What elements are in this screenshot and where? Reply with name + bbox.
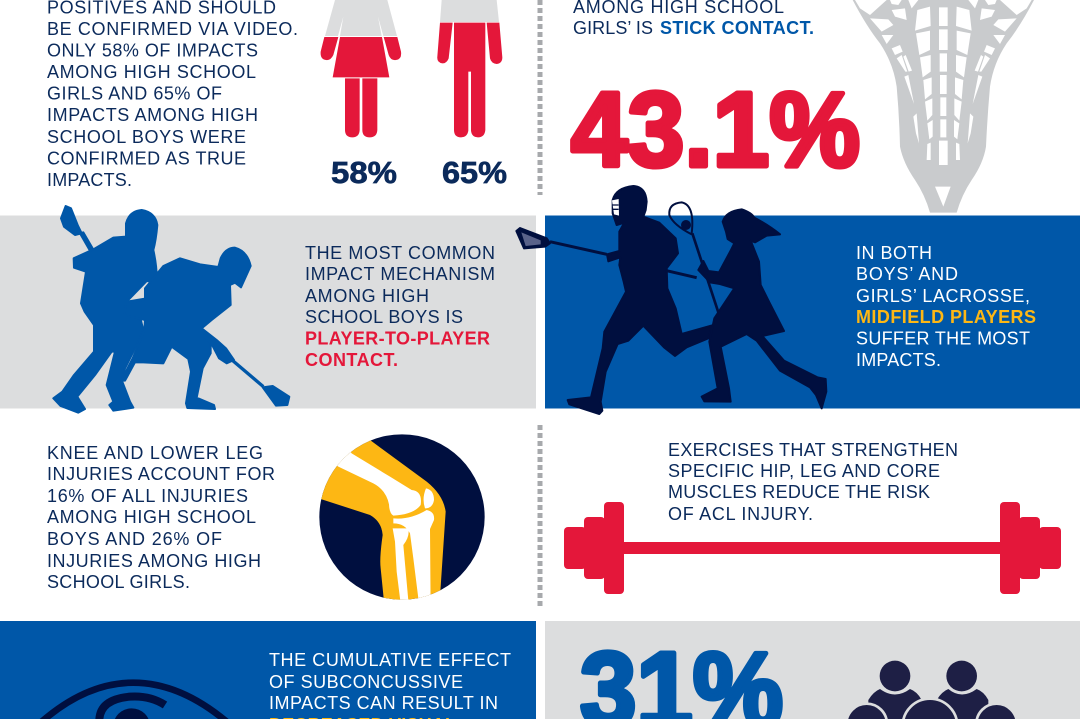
panel: player-to-player background bbox=[0, 216, 536, 408]
panel: false positives text: BE CONFIRMED VIA VIDEO. bbox=[47, 19, 298, 39]
panel: 31 percent background bbox=[545, 621, 1080, 719]
text: knee and lower leg injuries: INJURIES ACCOUNT FOR bbox=[47, 464, 275, 484]
icon: boy figure 65 percent bbox=[437, 0, 502, 137]
text: knee and lower leg injuries: INJURIES AMONG HIGH bbox=[47, 551, 261, 571]
panel: false positives text bbox=[47, 0, 298, 190]
text: player-to-player contact bbox=[305, 243, 495, 370]
icon: barbell bbox=[564, 502, 1061, 594]
stat: 65 percent: 65% bbox=[442, 155, 507, 190]
text: knee and lower leg injuries: KNEE AND LOWER LEG bbox=[47, 443, 263, 463]
text: exercises reduce ACL risk: MUSCLES REDUCE THE RISK bbox=[668, 482, 930, 502]
icon: knee joint bbox=[319, 434, 485, 600]
text: decreased visual: OF SUBCONCUSSIVE bbox=[269, 672, 463, 692]
text: knee and lower leg injuries: SCHOOL GIRLS. bbox=[47, 572, 190, 592]
panel: false positives text: CONFIRMED AS TRUE bbox=[47, 148, 246, 168]
text: knee and lower leg injuries: 16% OF ALL INJURIES bbox=[47, 486, 248, 506]
text: exercises reduce ACL risk bbox=[668, 440, 958, 524]
text: player-to-player contact: IMPACT MECHANISM bbox=[305, 264, 495, 284]
stat: 43.1 percent: 43.1% bbox=[571, 71, 860, 189]
text: stick contact: GIRLS’ IS bbox=[573, 18, 653, 38]
text: midfield players: GIRLS’ LACROSSE, bbox=[856, 286, 1030, 306]
icon: boys lacrosse players silhouette bbox=[53, 206, 289, 413]
text: stick contact bbox=[573, 0, 814, 38]
text: midfield players: SUFFER THE MOST bbox=[856, 328, 1030, 348]
text: exercises reduce ACL risk: EXERCISES THAT STRENGTHEN bbox=[668, 440, 958, 460]
text: knee and lower leg injuries: BOYS AND 26% OF bbox=[47, 529, 222, 549]
text: midfield players: BOYS’ AND bbox=[856, 264, 958, 284]
text: midfield players: IN BOTH bbox=[856, 243, 932, 263]
icon: lacrosse head bbox=[853, 0, 1034, 213]
panel: false positives text: ONLY 58% OF IMPACTS bbox=[47, 40, 258, 60]
panel: false positives text: SCHOOL BOYS WERE bbox=[47, 127, 246, 147]
panel: vision background bbox=[0, 621, 536, 719]
text: player-to-player contact: THE MOST COMMON bbox=[305, 243, 495, 263]
panel: midfield background bbox=[545, 216, 1080, 408]
panel: false positives text: IMPACTS AMONG HIGH bbox=[47, 105, 258, 125]
text: exercises reduce ACL risk: SPECIFIC HIP, LEG AND CORE bbox=[668, 461, 940, 481]
icon: eye bbox=[42, 683, 227, 719]
text: player-to-player contact: AMONG HIGH bbox=[305, 286, 429, 306]
panel: false positives text: GIRLS AND 65% OF bbox=[47, 84, 222, 104]
text: decreased visual: THE CUMULATIVE EFFECT bbox=[269, 650, 511, 670]
text: player-to-player contact: CONTACT. bbox=[305, 350, 398, 370]
text: midfield players: IMPACTS. bbox=[856, 350, 941, 370]
stat: 58 percent: 58% bbox=[331, 155, 397, 190]
text: midfield players: MIDFIELD PLAYERS bbox=[856, 307, 1036, 327]
text: player-to-player contact: PLAYER-TO-PLAYER bbox=[305, 328, 490, 348]
text: stick contact: STICK CONTACT. bbox=[660, 18, 814, 38]
text: decreased visual: IMPACTS CAN RESULT IN bbox=[269, 693, 498, 713]
text: knee and lower leg injuries: AMONG HIGH SCHOOL bbox=[47, 507, 256, 527]
text: decreased visual bbox=[269, 650, 511, 719]
icon: group of people bbox=[846, 661, 1017, 719]
text: midfield players bbox=[856, 243, 1036, 370]
text: exercises reduce ACL risk: OF ACL INJURY. bbox=[668, 504, 813, 524]
text: player-to-player contact: SCHOOL BOYS IS bbox=[305, 307, 463, 327]
panel: false positives text: AMONG HIGH SCHOOL bbox=[47, 62, 256, 82]
icon: girl figure 58 percent bbox=[321, 0, 401, 137]
icon: running lacrosse players silhouette bbox=[516, 186, 826, 414]
text: knee and lower leg injuries bbox=[47, 443, 275, 592]
panel: false positives text: IMPACTS. bbox=[47, 170, 132, 190]
